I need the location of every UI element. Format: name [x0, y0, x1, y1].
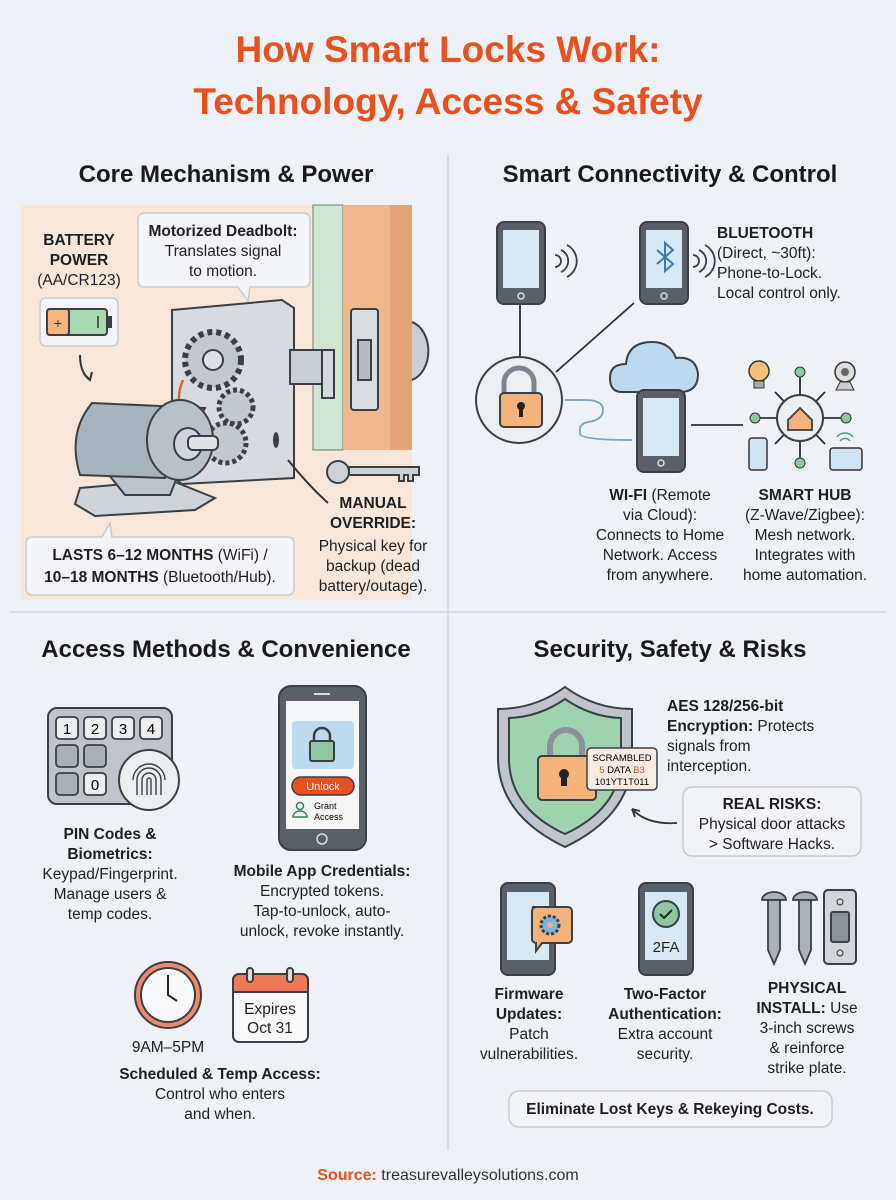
text: AES encryption: interception. — [667, 758, 751, 775]
text: firmware: Updates: — [496, 1006, 562, 1023]
icon: keypad — [48, 708, 179, 810]
icon: battery: + — [54, 315, 62, 331]
arrow: risks to shield — [632, 809, 677, 823]
text: bluetooth: Phone-to-Lock. — [717, 265, 822, 282]
callout: battery life: 10–18 MONTHS (Bluetooth/Hub). — [44, 569, 276, 586]
text: wifi: from anywhere. — [607, 567, 713, 584]
icon: calendar: Expires — [244, 1001, 296, 1018]
icon: screws and strike plate — [762, 890, 856, 964]
icon: shield with lock: 5 DATA B3 — [599, 765, 645, 776]
battery label — [37, 232, 121, 289]
illustration: motor — [75, 400, 218, 516]
text: AES encryption — [667, 698, 815, 775]
text: wifi — [596, 487, 724, 584]
callout: real risks — [683, 787, 861, 856]
callout: real risks: > Software Hacks. — [709, 836, 835, 853]
icon: phone 1 — [497, 222, 577, 304]
heading: core mechanism: Core Mechanism & Power — [79, 161, 373, 188]
text: AES encryption: AES 128/256-bit — [667, 698, 783, 715]
heading: security: Security, Safety & Risks — [533, 636, 807, 663]
text: pin codes: Manage users & — [54, 886, 167, 903]
icon: shield with lock: 101YT1T011 — [595, 777, 649, 788]
text: pin codes: PIN Codes & — [63, 826, 157, 843]
text: scheduled: Control who enters — [155, 1086, 285, 1103]
text: smart hub: home automation. — [743, 567, 867, 584]
text: bluetooth: Local control only. — [717, 285, 841, 302]
text: AES encryption: Encryption: Protects — [667, 718, 815, 735]
text: bluetooth: (Direct, ~30ft): — [717, 245, 816, 262]
text: manual override: Physical key for — [319, 538, 427, 555]
text: firmware: vulnerabilities. — [480, 1046, 578, 1063]
text: wifi: Connects to Home — [596, 527, 724, 544]
icon: 2FA phone — [639, 883, 693, 975]
text: smart hub: (Z-Wave/Zigbee): — [745, 507, 865, 524]
icon: clock: 9AM–5PM — [132, 1039, 204, 1056]
text: firmware — [480, 986, 578, 1063]
panel: security — [480, 636, 861, 1127]
text: manual override: backup (dead — [326, 558, 420, 575]
text: scheduled: Scheduled & Temp Access: — [119, 1066, 321, 1083]
icon: 2FA phone: 2FA — [653, 939, 679, 956]
text: wifi: Network. Access — [603, 547, 718, 564]
callout: battery life: LASTS 6–12 MONTHS (WiFi) / — [52, 547, 268, 564]
icon: calendar — [233, 968, 308, 1042]
icon: keypad: 3 — [119, 721, 127, 738]
text: physical install: PHYSICAL — [768, 980, 846, 997]
text: manual override: battery/outage). — [319, 578, 427, 595]
text: smart hub: SMART HUB — [758, 487, 852, 504]
icon: clock — [132, 962, 204, 1056]
text: physical install — [756, 980, 858, 1077]
text: two-factor — [608, 986, 722, 1063]
text: firmware: Patch — [509, 1026, 549, 1043]
icon: battery — [40, 298, 118, 346]
callout: eliminate lost keys: Eliminate Lost Keys & Rekeying Costs. — [526, 1101, 814, 1118]
icon: phone app: Unlock — [306, 781, 340, 793]
title: How Smart Locks Work: — [236, 29, 660, 70]
arrow: battery to motor — [80, 355, 92, 380]
text: mobile app: Tap-to-unlock, auto- — [254, 903, 390, 920]
text: firmware: Firmware — [495, 986, 564, 1003]
text: pin codes: Biometrics: — [67, 846, 153, 863]
icon: lock circle — [476, 357, 562, 443]
callout: eliminate lost keys — [509, 1091, 832, 1127]
text: smart hub: Mesh network. — [755, 527, 855, 544]
title — [193, 29, 703, 122]
icon: phone bluetooth — [640, 222, 715, 304]
callout: motorized deadbolt — [138, 213, 310, 301]
callout: motorized deadbolt: Motorized Deadbolt: — [149, 223, 297, 240]
battery label: POWER — [50, 252, 108, 269]
text: wifi: WI-FI (Remote — [609, 487, 711, 504]
icon: calendar: Oct 31 — [247, 1020, 293, 1037]
text: smart hub — [743, 487, 867, 584]
text: pin codes: Keypad/Fingerprint. — [42, 866, 178, 883]
text: manual override — [319, 495, 427, 595]
text: bluetooth — [717, 225, 841, 302]
text: physical install: & reinforce — [770, 1040, 844, 1057]
icon: smart hub — [749, 361, 862, 470]
text: manual override: MANUAL — [339, 495, 407, 512]
icon: phone app — [279, 686, 366, 850]
icon: keypad: 4 — [147, 721, 155, 738]
icon: firmware phone — [501, 883, 572, 975]
heading: connectivity: Smart Connectivity & Control — [503, 161, 837, 188]
panel: core mechanism & power — [22, 161, 428, 600]
text: two-factor: Authentication: — [608, 1006, 722, 1023]
battery label: BATTERY — [43, 232, 115, 249]
callout: real risks: REAL RISKS: — [723, 796, 821, 813]
text: smart hub: Integrates with — [755, 547, 855, 564]
panel: access methods — [41, 636, 411, 1123]
callout: motorized deadbolt: Translates signal — [165, 243, 281, 260]
text: two-factor: Two-Factor — [624, 986, 706, 1003]
connector lines — [520, 303, 743, 440]
text: mobile app — [234, 863, 410, 940]
text: physical install: INSTALL: Use — [756, 1000, 858, 1017]
text: mobile app: unlock, revoke instantly. — [240, 923, 404, 940]
text: bluetooth: BLUETOOTH — [717, 225, 813, 242]
icon: keypad: 1 — [63, 721, 71, 738]
callout: motorized deadbolt: to motion. — [189, 263, 257, 280]
title: Technology, Access & Safety — [193, 81, 703, 122]
door frame — [313, 205, 428, 450]
icon: keypad: 2 — [91, 721, 99, 738]
text: pin codes: temp codes. — [68, 906, 152, 923]
icon: keypad: 0 — [91, 777, 99, 794]
text: AES encryption: signals from — [667, 738, 751, 755]
illustration: lock box with gears — [172, 300, 334, 484]
text: two-factor: Extra account — [618, 1026, 713, 1043]
icon: phone app: Grant — [314, 801, 337, 811]
text: two-factor: security. — [637, 1046, 693, 1063]
icon: phone app: Access — [314, 812, 344, 822]
source: Source: treasurevalleysolutions.com — [317, 1167, 579, 1184]
text: physical install: 3-inch screws — [760, 1020, 855, 1037]
callout: battery life — [26, 523, 294, 595]
text: wifi: via Cloud): — [623, 507, 697, 524]
battery label: (AA/CR123) — [37, 272, 121, 289]
icon: key — [327, 461, 419, 483]
text: physical install: strike plate. — [767, 1060, 847, 1077]
heading: access methods: Access Methods & Convenience — [41, 636, 411, 663]
icon: shield with lock — [498, 687, 657, 847]
panel: smart connectivity — [476, 161, 867, 584]
text: pin codes — [42, 826, 178, 923]
text: manual override: OVERRIDE: — [330, 515, 416, 532]
icon: shield with lock: SCRAMBLED — [592, 753, 652, 764]
text: scheduled — [119, 1066, 321, 1123]
text: scheduled: and when. — [184, 1106, 256, 1123]
callout: real risks: Physical door attacks — [699, 816, 845, 833]
icon: cloud + phone — [610, 342, 698, 472]
text: mobile app: Mobile App Credentials: — [234, 863, 410, 880]
text: mobile app: Encrypted tokens. — [260, 883, 384, 900]
